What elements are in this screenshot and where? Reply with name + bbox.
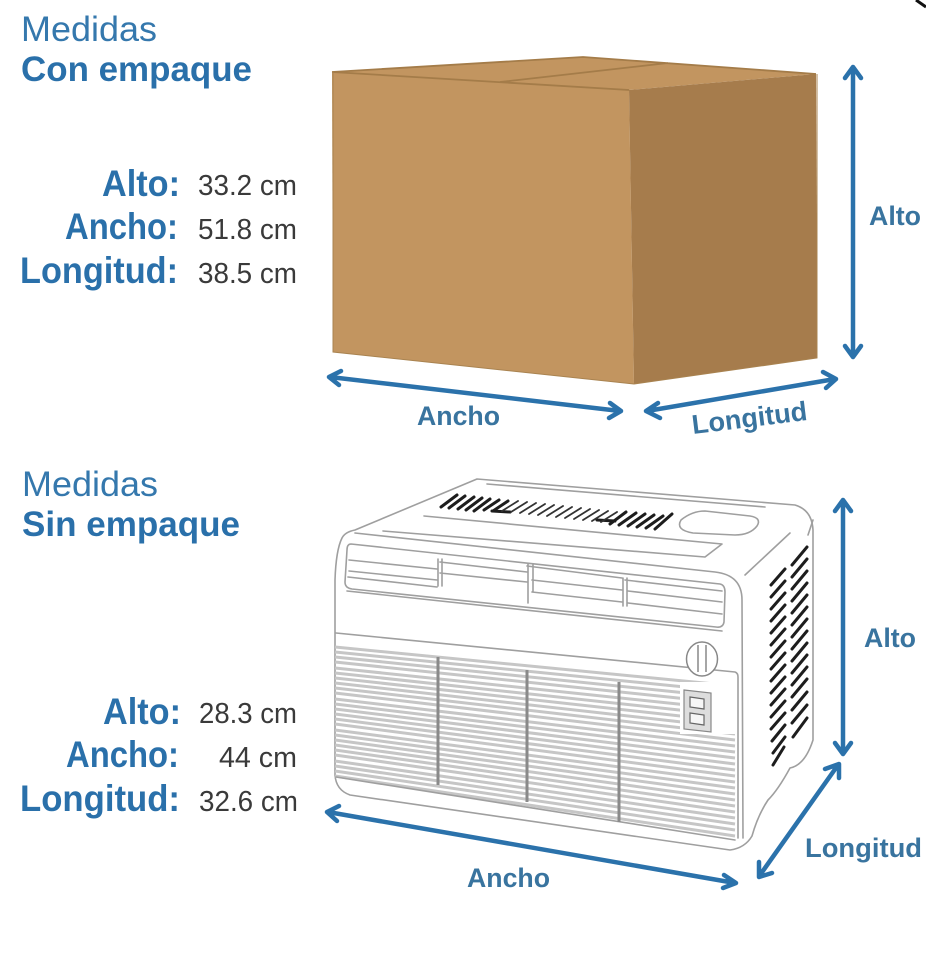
text block: package dimensions: Ancho:	[65, 206, 178, 247]
dial	[686, 642, 718, 676]
text block: package dimensions: 38.5 cm	[198, 258, 297, 290]
text block: unit dimensions	[20, 691, 298, 819]
heading: con empaque: Con empaque	[21, 50, 252, 89]
heading: con empaque: Medidas	[21, 10, 157, 49]
front louvers	[345, 544, 725, 631]
text block: package dimensions: 51.8 cm	[198, 214, 297, 246]
top control pad	[680, 511, 758, 535]
text block: package dimensions: 33.2 cm	[198, 170, 297, 202]
heading: con empaque	[21, 10, 252, 89]
text block: unit dimensions: 44 cm	[219, 742, 297, 774]
text block: unit dimensions: Ancho:	[66, 734, 179, 775]
side vents	[771, 547, 807, 765]
top vent	[441, 495, 672, 529]
arrow: unit height	[835, 500, 851, 754]
heading: sin empaque: Medidas	[22, 465, 158, 504]
label: box length: Longitud	[690, 396, 809, 440]
label: unit width: Ancho	[467, 863, 550, 893]
control panel	[680, 682, 737, 734]
arrow: unit width	[327, 806, 736, 888]
body outline	[335, 479, 813, 850]
grille top edge	[336, 633, 738, 838]
corner mark	[916, 0, 926, 7]
top panel lines	[355, 484, 813, 838]
text block: package dimensions	[20, 163, 297, 291]
text block: unit dimensions: Longitud:	[20, 778, 180, 819]
label: unit length: Longitud	[805, 833, 922, 863]
air conditioner	[335, 479, 813, 850]
text block: package dimensions: Longitud:	[20, 250, 178, 291]
grille bottom edge	[336, 777, 735, 840]
label: box width: Ancho	[417, 401, 500, 431]
cardboard box	[332, 57, 817, 384]
text block: unit dimensions: Alto:	[103, 691, 181, 732]
arrow: box width	[329, 371, 621, 418]
text block: unit dimensions: 28.3 cm	[199, 698, 297, 730]
heading: sin empaque	[22, 465, 240, 544]
arrow: unit length	[759, 764, 839, 877]
heading: sin empaque: Sin empaque	[22, 505, 240, 544]
arrow: box length	[646, 372, 836, 418]
text block: package dimensions: Alto:	[102, 163, 180, 204]
arrow: box height	[845, 67, 861, 357]
grille ribs	[438, 657, 619, 822]
label: box height: Alto	[869, 201, 921, 231]
text block: unit dimensions: 32.6 cm	[199, 786, 298, 818]
front grille slats	[335, 647, 735, 836]
label: unit height: Alto	[864, 623, 916, 653]
